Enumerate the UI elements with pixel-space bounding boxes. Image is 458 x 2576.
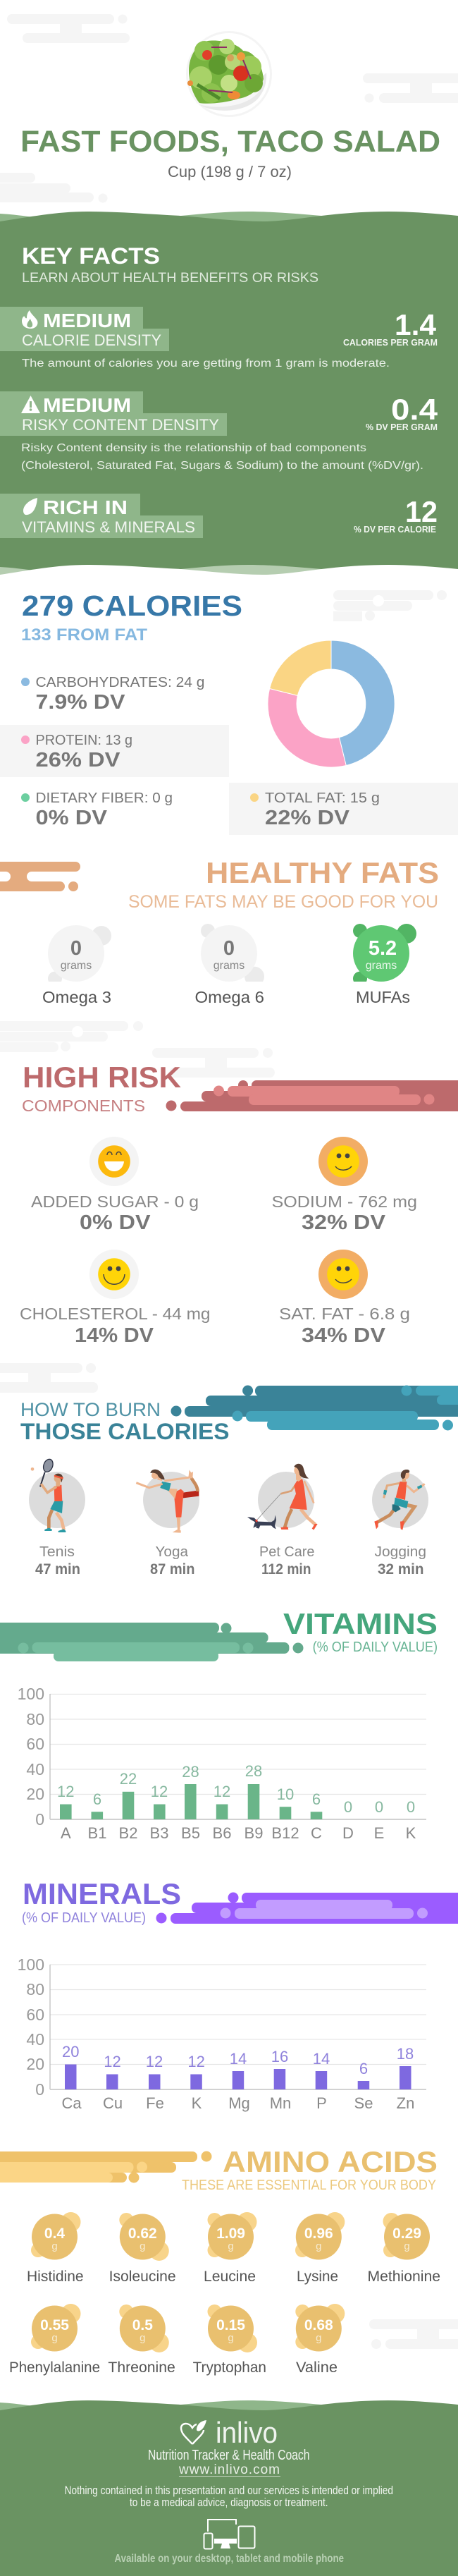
item: mufas: [353, 924, 416, 1006]
heading: key facts: KEY FACTS: [22, 243, 160, 269]
bar chart: vitamins: 10: [277, 1786, 294, 1803]
fact: risky content density: % DV PER GRAM: [366, 422, 438, 432]
item: added sugar: 0% DV: [80, 1211, 151, 1234]
fact: rich in vitamins and minerals: RICH IN: [43, 496, 128, 518]
amino: valine: [295, 2304, 345, 2376]
legend: protein: PROTEIN: 13 g: [35, 732, 132, 748]
bar chart: minerals: 20: [62, 2043, 80, 2061]
amino: lysine: 0.96: [304, 2226, 333, 2242]
donut chart: [268, 640, 395, 767]
fact: calorie density: [0, 307, 438, 370]
logo: inlivo: [181, 2416, 278, 2449]
serving size: Cup (198 g / 7 oz): [168, 163, 292, 181]
bar chart: minerals: Mg: [228, 2094, 250, 2112]
amino: histidine: [27, 2212, 84, 2285]
bar chart: vitamins: C: [311, 1824, 322, 1842]
subheading: percent of daily value: (% OF DAILY VALUE): [313, 1640, 438, 1655]
subheading: LEARN ABOUT HEALTH BENEFITS OR RISKS: [22, 271, 318, 286]
amino: isoleucine: 0.62: [128, 2226, 157, 2242]
item: mufas: MUFAs: [356, 988, 410, 1006]
amino: lysine: Lysine: [297, 2269, 338, 2285]
item: omega 6: 0: [223, 937, 235, 960]
legend: total fat: 22% DV: [265, 807, 350, 829]
icon: salad bowl: [186, 31, 272, 117]
heading: those calories: THOSE CALORIES: [20, 1419, 230, 1444]
bar chart: vitamins: B2: [119, 1824, 137, 1842]
panel: amino acids: [0, 2145, 440, 2376]
panel: healthy fats: [0, 856, 439, 1006]
heading: vitamins: VITAMINS: [283, 1607, 438, 1640]
activity: yoga: Yoga: [155, 1544, 189, 1560]
activity: pet care: Pet Care: [259, 1544, 314, 1560]
fact: rich in vitamins and minerals: % DV PER CALORIE: [354, 525, 436, 535]
panel: minerals: [18, 1877, 458, 2112]
bar chart: minerals: 40: [26, 2030, 44, 2049]
legend: carbohydrates: 7.9% DV: [35, 691, 125, 714]
amino: leucine: Leucine: [204, 2269, 256, 2285]
amino: isoleucine: g: [140, 2240, 145, 2252]
item: omega 6: [194, 924, 264, 1006]
subheading: percent of daily value: (% OF DAILY VALUE): [22, 1910, 146, 1926]
item: cholesterol: 14% DV: [75, 1324, 154, 1347]
activity: tennis: Tenis: [39, 1544, 75, 1560]
bar chart: minerals: [18, 1955, 426, 2112]
bar chart: vitamins: 6: [312, 1790, 321, 1808]
bar chart: vitamins: K: [406, 1824, 416, 1842]
amino: phenylalanine: [9, 2304, 100, 2376]
logo: inlivo: inlivo: [216, 2416, 278, 2449]
amino: lysine: g: [316, 2240, 321, 2252]
amino: valine: 0.68: [304, 2317, 333, 2333]
subheading: components: COMPONENTS: [22, 1097, 145, 1115]
bar chart: minerals: 14: [313, 2050, 330, 2068]
fact: calorie density: 1.4: [395, 308, 437, 341]
fact: risky content density: MEDIUM: [43, 394, 131, 416]
item: sodium: SODIUM - 762 mg: [272, 1192, 417, 1211]
icon: yoga figure: [136, 1470, 199, 1533]
amino: histidine: 0.4: [44, 2226, 65, 2242]
activity: jogging: [372, 1470, 428, 1577]
bar chart: vitamins: 20: [26, 1785, 44, 1803]
amino: tryptophan: [193, 2305, 266, 2376]
activity: pet care: [247, 1464, 318, 1577]
amino: methionine: g: [404, 2240, 410, 2252]
disclaimer: to be a medical advice, diagnosis or treatment.: [130, 2496, 328, 2509]
heading: how to burn: HOW TO BURN: [20, 1399, 161, 1420]
subheading: from fat: 133 FROM FAT: [21, 625, 147, 645]
bar chart: vitamins: 100: [18, 1685, 44, 1703]
panel: vitamins: [0, 1607, 438, 1842]
bar chart: minerals: 12: [104, 2053, 121, 2070]
footer: [0, 2400, 458, 2576]
bar chart: minerals: Fe: [146, 2094, 164, 2112]
amino: threonine: [108, 2305, 175, 2376]
activity: jogging: Jogging: [375, 1544, 426, 1560]
legend: carbohydrates: CARBOHYDRATES: 24 g: [35, 674, 204, 690]
icon: warning: [21, 396, 40, 413]
subheading: healthy fats: SOME FATS MAY BE GOOD FOR YOU: [128, 892, 438, 912]
bar chart: vitamins: B3: [150, 1824, 168, 1842]
bar chart: minerals: 60: [26, 2006, 44, 2024]
legend: dietary fiber: [21, 790, 173, 829]
bar chart: vitamins: E: [374, 1824, 384, 1842]
bar chart: vitamins: 0: [344, 1798, 352, 1816]
bar chart: minerals: 100: [18, 1955, 44, 1974]
bar chart: vitamins: 6: [93, 1790, 101, 1808]
legend: total fat: TOTAL FAT: 15 g: [265, 790, 380, 806]
availability note: Available on your desktop, tablet and mobile phone: [114, 2553, 344, 2565]
item: omega 6: grams: [213, 960, 245, 972]
amino: leucine: [204, 2212, 256, 2285]
fact: risky content density: Risky Content density is the relationship of bad components: [21, 442, 366, 454]
amino: leucine: g: [228, 2240, 234, 2252]
bar chart: vitamins: 0: [407, 1798, 415, 1816]
bar chart: minerals: 0: [35, 2080, 44, 2099]
heading: calories: 279 CALORIES: [22, 590, 242, 622]
amino: tryptophan: 0.15: [216, 2317, 245, 2333]
heading: high risk: HIGH RISK: [23, 1061, 181, 1094]
amino: methionine: [368, 2213, 440, 2285]
amino: threonine: g: [140, 2332, 145, 2344]
amino: leucine: 1.09: [216, 2226, 245, 2242]
tagline: Nutrition Tracker & Health Coach: [148, 2448, 310, 2463]
item: sodium: 32% DV: [302, 1211, 386, 1234]
bar chart: vitamins: 12: [57, 1783, 75, 1800]
bar chart: vitamins: 80: [26, 1710, 44, 1728]
panel: high risk components: [20, 1061, 458, 1347]
bar chart: vitamins: 28: [182, 1763, 199, 1781]
bar chart: minerals: 12: [146, 2053, 163, 2070]
item: cholesterol: [20, 1250, 210, 1347]
fact: calorie density: The amount of calories you are getting from 1 gram is moderate.: [22, 358, 390, 370]
icon: woman walking dog: [247, 1464, 318, 1530]
bar chart: vitamins: [18, 1685, 426, 1842]
disclaimer: [65, 2484, 393, 2509]
fact: risky content density: [0, 391, 438, 472]
item: sodium: [272, 1137, 417, 1234]
legend: total fat: [250, 790, 380, 829]
legend: protein: [21, 732, 132, 771]
fact: calorie density: MEDIUM: [43, 310, 131, 331]
item: saturated fat: SAT. FAT - 6.8 g: [279, 1305, 410, 1323]
item: omega 3: [42, 925, 111, 1006]
amino: lysine: [295, 2212, 345, 2285]
amino: isoleucine: [109, 2213, 176, 2285]
fact: calorie density: CALORIE DENSITY: [22, 331, 161, 349]
amino: tryptophan: g: [228, 2332, 234, 2344]
legend: dietary fiber: DIETARY FIBER: 0 g: [35, 790, 173, 806]
fact: calorie density: CALORIES PER GRAM: [343, 338, 438, 348]
legend: carbohydrates: [21, 674, 204, 714]
bar chart: minerals: Mn: [270, 2094, 291, 2112]
activity: tennis: [29, 1458, 85, 1577]
amino: valine: g: [316, 2332, 321, 2344]
subheading: amino acids: THESE ARE ESSENTIAL FOR YOUR BODY: [182, 2178, 436, 2193]
banner: green bars: [0, 1623, 303, 1661]
amino: valine: Valine: [296, 2360, 338, 2376]
item: omega 6: Omega 6: [194, 988, 264, 1006]
fact: rich in vitamins and minerals: 12: [405, 495, 438, 528]
bar chart: minerals: P: [316, 2094, 327, 2112]
bar chart: vitamins: D: [342, 1824, 354, 1842]
bar chart: minerals: Se: [354, 2094, 373, 2112]
bar chart: vitamins: 12: [213, 1783, 230, 1800]
bar chart: vitamins: B12: [271, 1824, 299, 1842]
panel: calories: [0, 590, 458, 835]
bar chart: minerals: K: [192, 2094, 202, 2112]
bar chart: vitamins: B6: [213, 1824, 231, 1842]
item: added sugar: [31, 1137, 199, 1234]
item: saturated fat: 34% DV: [302, 1324, 386, 1347]
bar chart: minerals: Cu: [103, 2094, 123, 2112]
amino: histidine: Histidine: [27, 2269, 84, 2285]
activity: tennis: 47 min: [35, 1561, 80, 1577]
amino: threonine: 0.5: [132, 2317, 153, 2333]
legend: protein: 26% DV: [35, 749, 120, 771]
activity: jogging: 32 min: [378, 1561, 424, 1577]
icon: leaf: [23, 498, 37, 515]
legend: dietary fiber: 0% DV: [35, 807, 108, 829]
bar chart: vitamins: A: [61, 1824, 71, 1842]
bar chart: minerals: 16: [271, 2048, 288, 2065]
fact: risky content density: RISKY CONTENT DENSITY: [22, 416, 219, 434]
bar chart: vitamins: 22: [120, 1770, 137, 1788]
amino: phenylalanine: g: [51, 2332, 58, 2344]
item: added sugar: ADDED SUGAR - 0 g: [31, 1192, 199, 1211]
fact: risky content density: 0.4: [391, 393, 438, 426]
icon: devices: [204, 2520, 255, 2548]
amino: histidine: g: [51, 2240, 58, 2252]
banner: orange bars: [0, 862, 80, 891]
bar chart: vitamins: 28: [245, 1762, 262, 1780]
bar chart: vitamins: 0: [375, 1798, 383, 1816]
item: omega 3: grams: [61, 960, 92, 972]
panel: key facts: [0, 212, 458, 593]
amino: tryptophan: Tryptophan: [193, 2360, 266, 2376]
activity: pet care: 112 min: [261, 1561, 311, 1577]
website link: www.inlivo.com: [178, 2462, 280, 2477]
header: salad and title: [20, 31, 440, 181]
banner: red bars: [166, 1080, 458, 1111]
item: omega 3: Omega 3: [42, 988, 111, 1006]
banner: yellow bars: [0, 2151, 211, 2183]
bar chart: vitamins: 60: [26, 1735, 44, 1753]
bar chart: minerals: 80: [26, 1980, 44, 1998]
bar chart: vitamins: 12: [151, 1783, 168, 1800]
icon: flame: [22, 310, 37, 329]
item: omega 3: 0: [70, 937, 82, 960]
bar chart: minerals: 20: [26, 2055, 44, 2073]
fact: rich in vitamins and minerals: VITAMINS & MINERALS: [22, 518, 195, 536]
heading: minerals: MINERALS: [23, 1877, 181, 1910]
activity: yoga: 87 min: [150, 1561, 194, 1577]
banner: purple bars: [156, 1893, 458, 1924]
banner: teal bars: [171, 1385, 458, 1430]
bar chart: vitamins: B1: [88, 1824, 106, 1842]
bar chart: minerals: 12: [187, 2053, 205, 2070]
disclaimer: Nothing contained in this presentation and our services is intended or implied: [65, 2484, 393, 2497]
bar chart: minerals: Zn: [397, 2094, 414, 2112]
icon: jogger: [374, 1470, 425, 1530]
amino: phenylalanine: 0.55: [40, 2317, 69, 2333]
bar chart: vitamins: 0: [35, 1810, 44, 1829]
amino: methionine: Methionine: [368, 2269, 440, 2285]
activity: yoga: [136, 1470, 199, 1577]
heading: healthy fats: HEALTHY FATS: [206, 856, 439, 889]
bar chart: minerals: 18: [397, 2045, 414, 2063]
icon: tennis player: [31, 1458, 66, 1532]
heading: amino acids: AMINO ACIDS: [223, 2145, 438, 2178]
bar chart: minerals: 14: [230, 2050, 247, 2068]
title: FAST FOODS, TACO SALAD: [20, 125, 440, 159]
amino: threonine: Threonine: [108, 2360, 175, 2376]
fact: risky content density: (Cholesterol, Saturated Fat, Sugars & Sodium) to the amount (%DV/gr).: [21, 460, 423, 472]
amino: isoleucine: Isoleucine: [109, 2269, 176, 2285]
bar chart: vitamins: B5: [181, 1824, 200, 1842]
bar chart: vitamins: B9: [245, 1824, 263, 1842]
fact: rich in vitamins and minerals: [0, 494, 438, 538]
bar chart: minerals: Ca: [61, 2094, 82, 2112]
panel: how to burn those calories: [20, 1385, 458, 1577]
bar chart: minerals: 6: [359, 2060, 368, 2077]
amino: methionine: 0.29: [392, 2226, 421, 2242]
item: mufas: grams: [366, 960, 397, 972]
item: mufas: 5.2: [369, 937, 397, 960]
item: saturated fat: [279, 1250, 410, 1347]
bar chart: vitamins: 40: [26, 1760, 44, 1778]
item: cholesterol: CHOLESTEROL - 44 mg: [20, 1305, 210, 1323]
amino: phenylalanine: Phenylalanine: [9, 2360, 100, 2376]
